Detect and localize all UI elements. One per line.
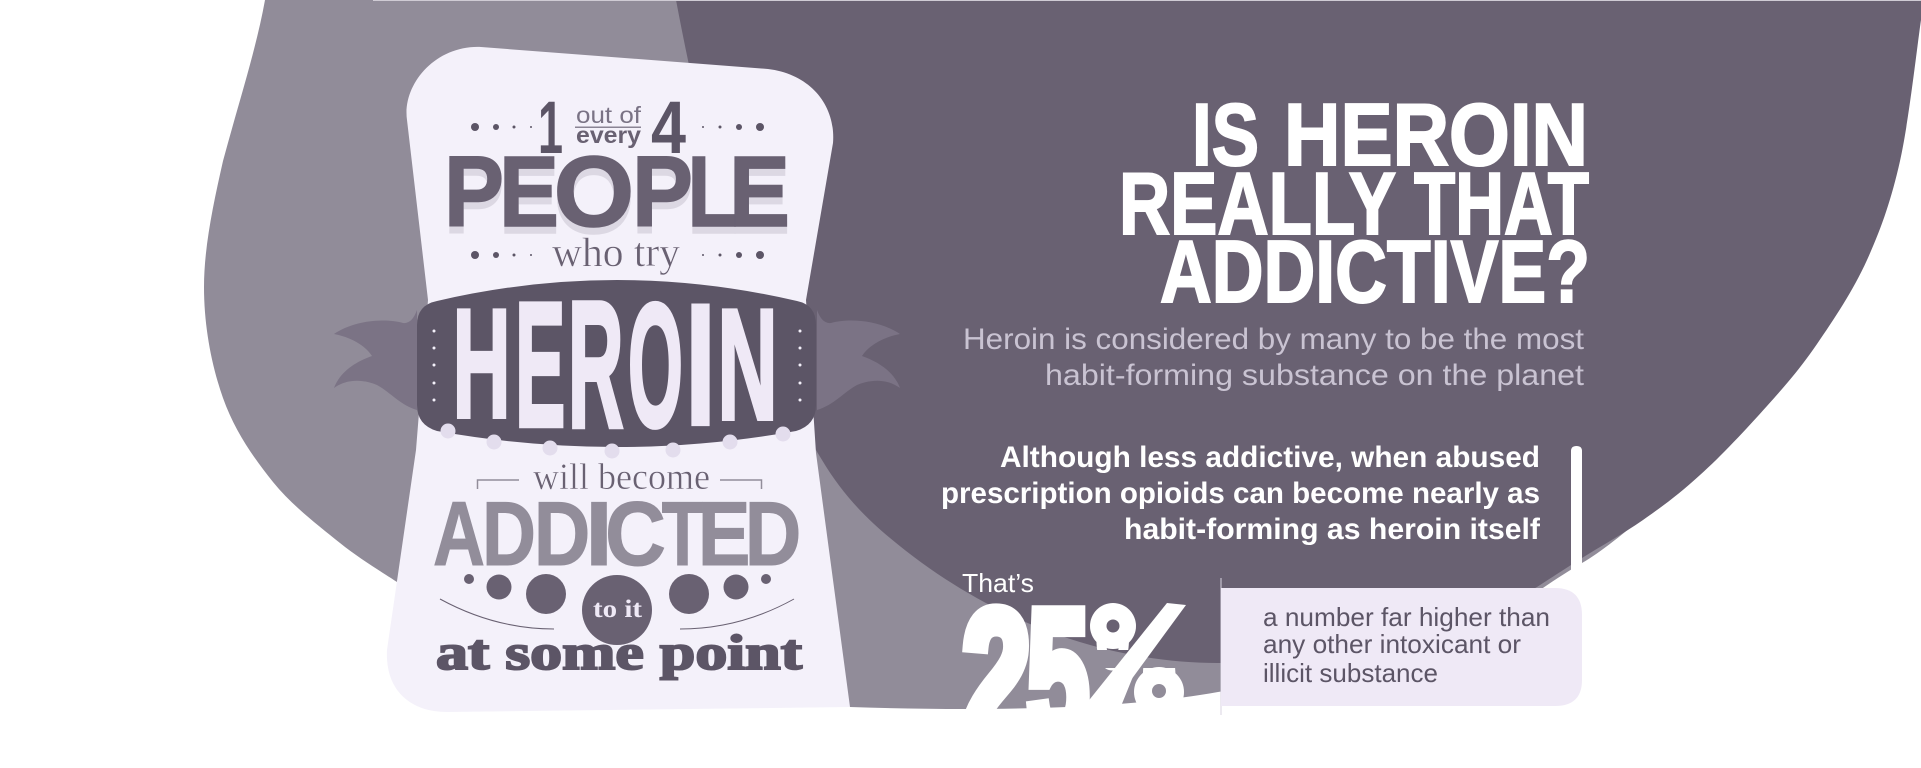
heading: 1 out of every 4: out of: [576, 102, 642, 128]
callout text: illicit substance: [1263, 658, 1438, 688]
text block: prescription opioids: [941, 441, 1541, 546]
title: REALLY: [1119, 154, 1396, 253]
heading: PEOPLE: [444, 136, 790, 248]
white connector bar: [1571, 446, 1582, 588]
heading: 1 out of every 4: 4: [651, 86, 686, 169]
title: THAT: [1414, 154, 1589, 253]
callout text: any other intoxicant or: [1263, 629, 1521, 659]
heading shadow: PEOPLE: L: [688, 143, 738, 255]
stat: 25%: %: [1094, 573, 1178, 743]
wings behind banner: [334, 310, 900, 410]
panel: card: [387, 47, 850, 712]
banner plate: [417, 280, 816, 447]
background shape: light blob: [204, 0, 1650, 709]
text: who try: who try: [552, 229, 681, 275]
brackets: [478, 480, 762, 489]
text: at some point: at some point: [436, 624, 802, 680]
vertical divider: [1220, 578, 1222, 715]
heading: PEOPLE: P: [444, 136, 504, 248]
heading: PEOPLE: E: [499, 136, 559, 248]
heading: ADDICTED: E: [698, 484, 750, 585]
heading: PEOPLE: E: [729, 136, 790, 248]
heading: ADDICTED: D: [745, 484, 801, 585]
text block: prescription opioids: habit-forming as heroin itself: [1124, 513, 1541, 546]
heading: PEOPLE: O: [554, 136, 634, 248]
badge: to it: to it: [593, 596, 643, 623]
subtitle: Heroin is considered by many to be the most: [963, 323, 1585, 356]
subtitle: habit-forming substance on the planet: [1045, 359, 1585, 392]
heading: ADDICTED: T: [662, 484, 703, 585]
heading: PEOPLE: L: [688, 136, 738, 248]
stat: 25%: [962, 603, 1186, 709]
callout text: a number far higher than: [1263, 602, 1550, 632]
heading: ADDICTED: C: [605, 484, 666, 585]
callout box: [1221, 588, 1582, 706]
title: IS: [1192, 85, 1259, 184]
heading: 1 out of every 4: [538, 86, 686, 169]
text: That's: That’s: [962, 568, 1034, 598]
background shape: dark blob: [676, 0, 1921, 663]
curved lines: [440, 599, 794, 629]
banner beads: [440, 424, 790, 458]
heading: 1 out of every 4: 1: [538, 86, 563, 169]
heading shadow: PEOPLE: E: [499, 143, 559, 255]
heading: ADDICTED: [433, 484, 801, 585]
subtitle: [963, 323, 1585, 392]
heading shadow: PEOPLE: P: [632, 143, 693, 255]
banner word: HEROIN: R: [568, 264, 624, 465]
banner word: HEROIN: I: [686, 269, 716, 461]
heading: ADDICTED: A: [433, 484, 485, 585]
text block: prescription opioids: prescription opioids can become nearly as: [941, 477, 1540, 510]
banner word: HEROIN: O: [628, 267, 683, 464]
text block: prescription opioids: Although less addictive, when abused: [1000, 441, 1540, 474]
title: HEROIN: [1284, 85, 1588, 184]
title: [1119, 85, 1590, 321]
dots row one: [471, 123, 764, 131]
dots row two: [471, 251, 764, 259]
banner side dots: [432, 330, 802, 402]
heading: PEOPLE: P: [632, 136, 693, 248]
heading: ADDICTED: D: [534, 484, 590, 585]
decorative circles: [464, 574, 771, 614]
title: ADDICTIVE?: [1160, 222, 1590, 321]
card background: [387, 47, 850, 712]
banner word: HEROIN: N: [717, 277, 778, 454]
heading: ADDICTED: I: [585, 484, 613, 585]
heading shadow: PEOPLE: P: [444, 143, 504, 255]
heading: 1 out of every 4: every: [576, 122, 641, 148]
callout text: [1263, 602, 1550, 688]
heading shadow: PEOPLE: [444, 143, 790, 255]
heading shadow: PEOPLE: O: [554, 143, 634, 255]
banner word: HEROIN: H: [453, 277, 511, 450]
heading: ADDICTED: D: [482, 484, 536, 585]
heading shadow: PEOPLE: E: [729, 143, 790, 255]
text: will become: will become: [533, 457, 710, 498]
badge: to it: [582, 575, 652, 645]
banner word: HEROIN: E: [515, 264, 565, 464]
banner word: HEROIN: [453, 264, 778, 465]
